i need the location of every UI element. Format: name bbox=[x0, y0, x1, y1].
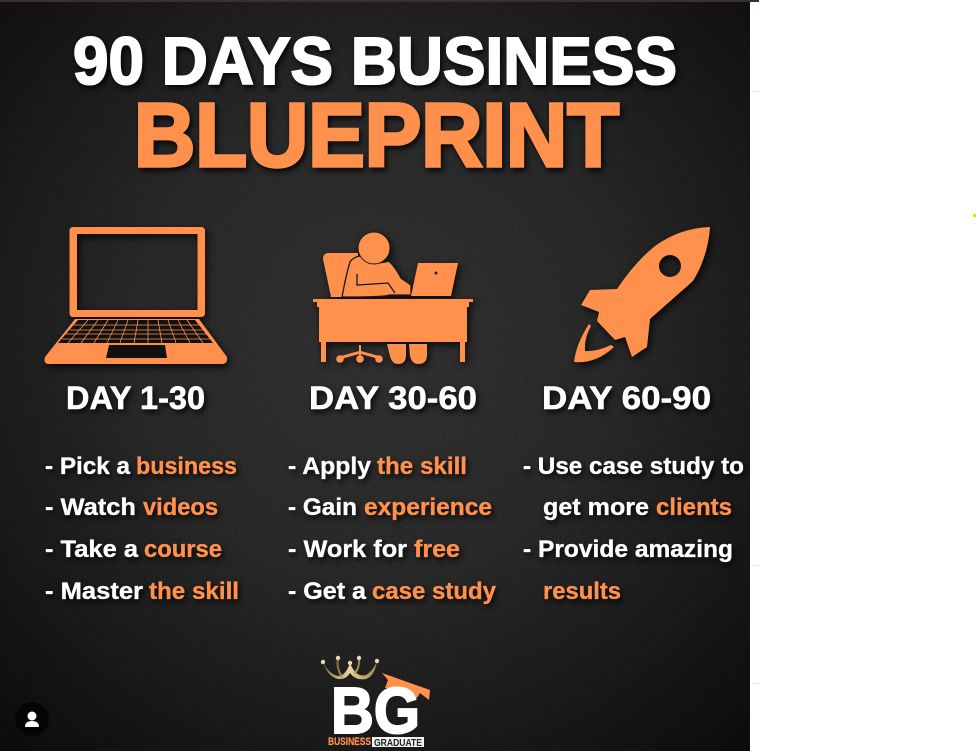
logo letters: BG bbox=[331, 674, 420, 747]
list: day 30-60 tasks bbox=[288, 453, 497, 605]
logo wordmark: BUSINESS bbox=[328, 736, 371, 748]
list: day 60-90 tasks bbox=[523, 453, 744, 605]
list: day 60-90 tasks: clients bbox=[656, 494, 732, 521]
list: day 1-30 tasks: - Take a bbox=[45, 536, 139, 563]
heading: day 60-90: DAY 60-90 bbox=[542, 380, 711, 416]
list: day 1-30 tasks: - Watch bbox=[45, 494, 136, 521]
list: day 60-90 tasks: - Use case study to bbox=[523, 453, 744, 480]
day 30-60 column bbox=[288, 380, 497, 605]
title: BLUEPRINT bbox=[134, 86, 619, 186]
list: day 30-60 tasks: - Work for bbox=[288, 536, 407, 563]
list: day 30-60 tasks: - Gain bbox=[288, 494, 357, 521]
logo wordmark: GRADUATE bbox=[374, 737, 422, 749]
list: day 1-30 tasks: business bbox=[136, 453, 237, 480]
logo: Business Graduate bbox=[321, 656, 430, 749]
logo wordmark bbox=[328, 736, 424, 749]
list: day 1-30 tasks: - Pick a bbox=[45, 453, 131, 480]
list: day 30-60 tasks: - Apply bbox=[288, 453, 372, 480]
list: day 1-30 tasks: the skill bbox=[149, 578, 239, 605]
icon: crown bbox=[321, 656, 379, 679]
day 1-30 column bbox=[45, 380, 239, 605]
list: day 60-90 tasks: - Provide amazing bbox=[523, 536, 733, 563]
title: 90 DAYS BUSINESS bbox=[73, 24, 677, 99]
list: day 30-60 tasks: - Get a bbox=[288, 578, 367, 605]
list: day 30-60 tasks: experience bbox=[364, 494, 492, 521]
list: day 30-60 tasks: free bbox=[414, 536, 460, 563]
list: day 1-30 tasks: course bbox=[144, 536, 222, 563]
day 60-90 column bbox=[523, 380, 744, 605]
icon: laptop bbox=[44, 227, 227, 364]
list: day 1-30 tasks bbox=[45, 453, 239, 605]
list: day 30-60 tasks: case study bbox=[372, 578, 497, 605]
title bbox=[73, 24, 677, 186]
icon: rocket bbox=[574, 227, 710, 362]
heading: day 30-60: DAY 30-60 bbox=[309, 380, 477, 416]
list: day 30-60 tasks: the skill bbox=[377, 453, 467, 480]
heading: day 1-30: DAY 1-30 bbox=[66, 380, 205, 416]
icon: profile badge bbox=[15, 702, 49, 736]
list: day 60-90 tasks: get more bbox=[543, 494, 649, 521]
icon: graduation cap bbox=[382, 673, 430, 700]
icon: person working at desk bbox=[313, 232, 473, 364]
list: day 1-30 tasks: videos bbox=[143, 494, 218, 521]
background panel bbox=[0, 0, 750, 751]
list: day 60-90 tasks: results bbox=[543, 578, 621, 605]
list: day 1-30 tasks: - Master bbox=[45, 578, 143, 605]
